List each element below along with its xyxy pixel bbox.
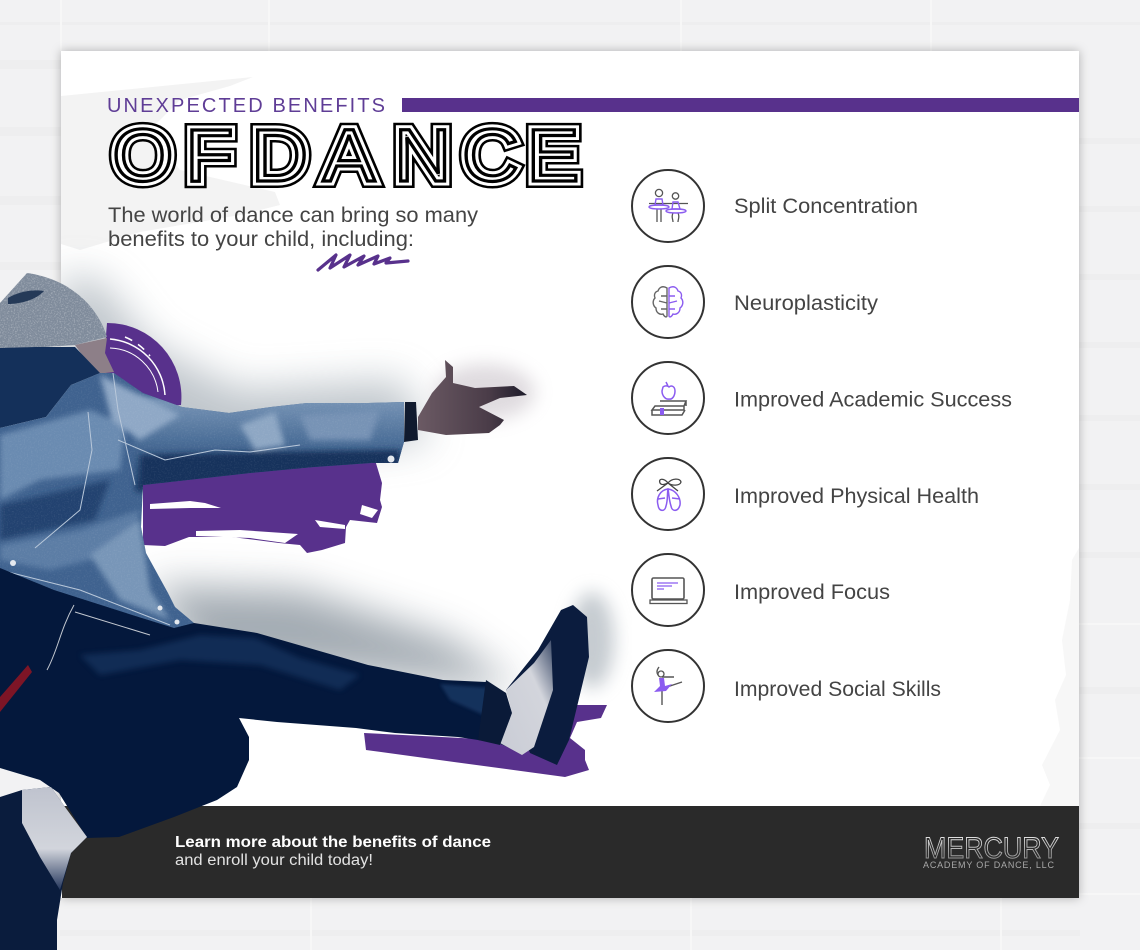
- purple brush circle behind head: [100, 323, 181, 410]
- title block: [107, 95, 1079, 270]
- dancer figure: [0, 273, 589, 950]
- benefit: improved focus: Improved Focus: [734, 581, 890, 604]
- drawstring: [47, 605, 150, 670]
- jacket buttons: [10, 456, 394, 624]
- footer call to action: and enroll your child today!: [175, 852, 373, 869]
- purple paint stroke behind shoe: [364, 705, 607, 777]
- eyebrow heading: UNEXPECTED BENEFITS: [107, 95, 385, 117]
- hand: [418, 360, 527, 435]
- right shoe sole: [506, 605, 589, 765]
- trousers: [0, 560, 515, 838]
- soft grey shadow behind dancer: [61, 275, 614, 690]
- hat fold: [8, 290, 44, 304]
- purple scribble underline: [318, 255, 408, 270]
- benefit: split concentration: [632, 170, 918, 242]
- left shoe: [0, 787, 87, 950]
- purple paint stroke behind arm: [143, 460, 382, 553]
- benefit: split concentration: Split Concentration: [734, 195, 918, 218]
- purple header rule: [402, 98, 1079, 112]
- main title: OFDANCE: [112, 115, 579, 197]
- decorative grey splatter at right edge: [1040, 548, 1079, 806]
- benefit: improved focus: [632, 554, 890, 626]
- red shirt stripe: [0, 665, 32, 712]
- intro paragraph: The world of dance can bring so many: [108, 204, 479, 227]
- trouser cuff: [478, 680, 512, 745]
- hat: [0, 273, 107, 350]
- denim jacket: [0, 370, 420, 630]
- benefit: improved social skills: [632, 650, 941, 722]
- intro paragraph: [108, 204, 479, 251]
- benefit: improved social skills: Improved Social Skills: [734, 678, 941, 701]
- main title: OFDANCE: [112, 115, 579, 197]
- logo: Mercury Academy of Dance: ACADEMY OF DANCE, LLC: [923, 860, 1054, 870]
- footer call to action: [175, 834, 491, 869]
- footer bar: [62, 806, 1079, 898]
- main title: OFDANCE: [112, 115, 579, 197]
- intro paragraph: benefits to your child, including:: [108, 228, 414, 251]
- benefit: improved academic success: [632, 362, 1012, 434]
- footer call to action: Learn more about the benefits of dance: [175, 834, 491, 851]
- trouser highlights: [80, 635, 495, 720]
- jacket cuff: [404, 402, 418, 442]
- benefit: neuroplasticity: Neuroplasticity: [734, 292, 879, 315]
- benefits list: [632, 170, 1012, 722]
- benefit: improved physical health: [632, 458, 979, 530]
- face: [75, 338, 114, 374]
- hood: [0, 347, 100, 428]
- logo: Mercury Academy of Dance: MERCURY: [924, 832, 1059, 865]
- benefit: improved academic success: Improved Academic Success: [734, 388, 1012, 412]
- right shoe upper: [500, 640, 553, 755]
- panel: white card: [61, 51, 1079, 898]
- decorative grey brush behind title: [61, 77, 280, 250]
- benefit: neuroplasticity: [632, 266, 879, 338]
- benefit: improved physical health: Improved Physical Health: [734, 485, 979, 508]
